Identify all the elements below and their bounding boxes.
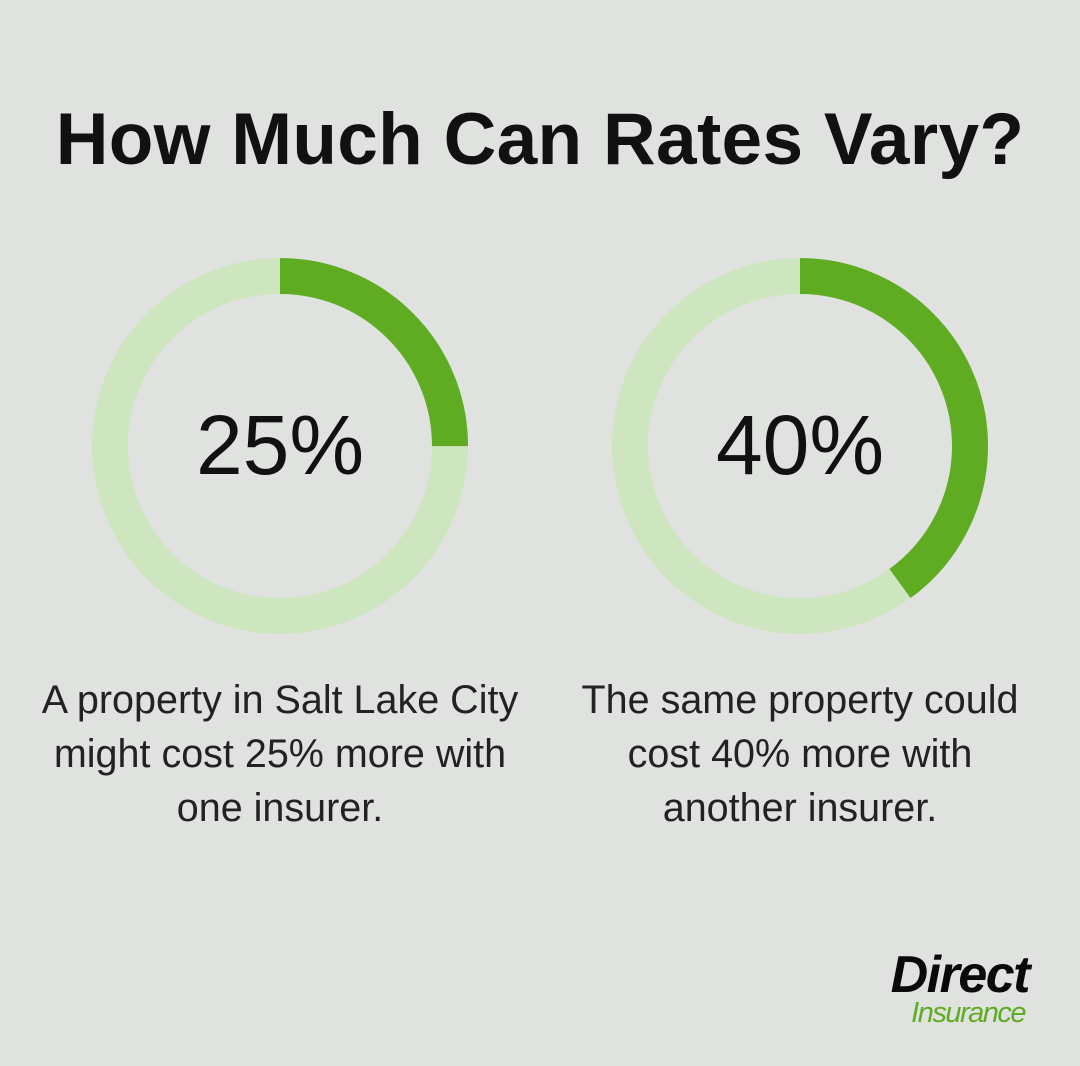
stat: 25%: 25% <box>196 398 364 492</box>
caption right: another insurer. <box>663 786 937 830</box>
caption left: might cost 25% more with <box>54 732 506 776</box>
caption right: cost 40% more with <box>628 732 972 776</box>
logo: Insurance <box>911 997 1025 1029</box>
title: How Much Can Rates Vary? <box>56 99 1024 180</box>
logo <box>891 946 1032 1029</box>
logo: Direct <box>891 946 1029 1004</box>
caption left <box>42 678 518 830</box>
donut chart: 40% <box>612 258 988 634</box>
caption left: one insurer. <box>177 786 383 830</box>
donut chart: 25% <box>92 258 468 634</box>
caption left: A property in Salt Lake City <box>42 678 518 722</box>
caption right: The same property could <box>582 678 1018 722</box>
stat: 40%: 40% <box>716 398 884 492</box>
caption right <box>582 678 1018 830</box>
